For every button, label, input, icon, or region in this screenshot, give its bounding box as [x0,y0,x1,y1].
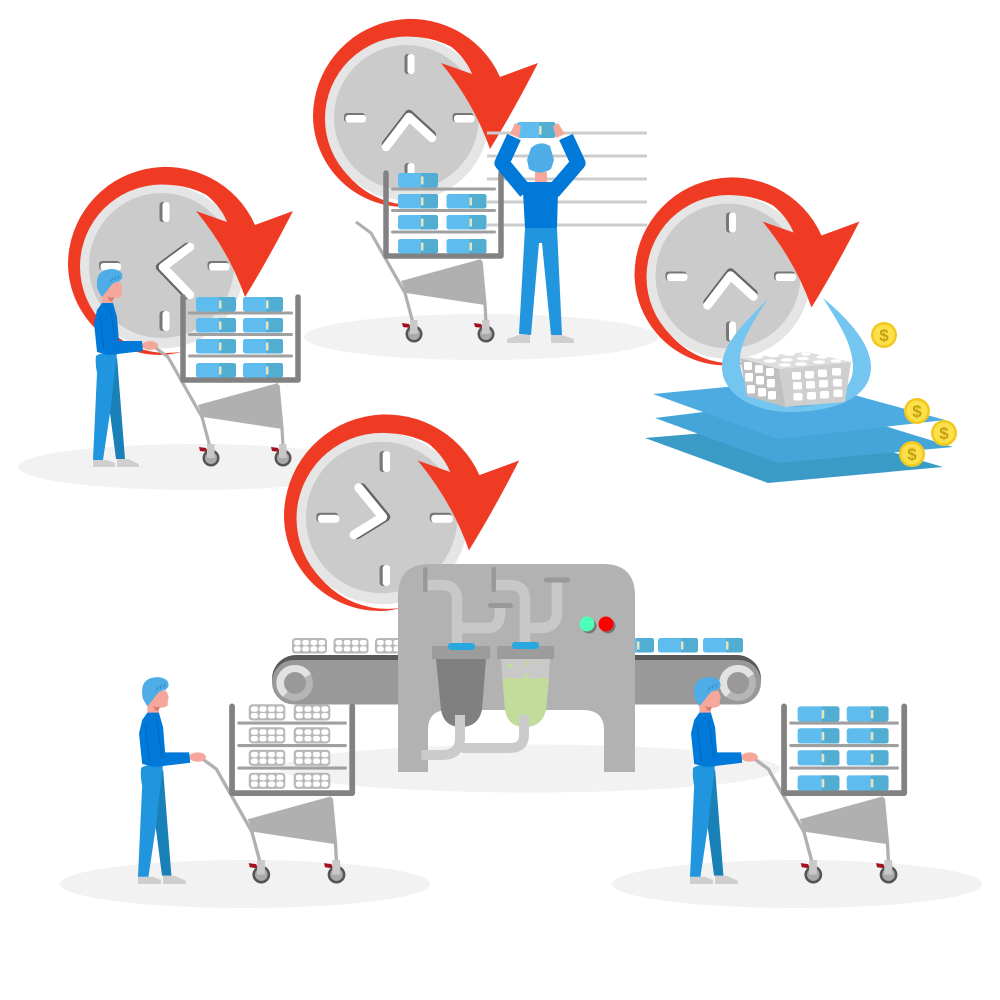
coin fourth [899,441,925,467]
ground shadows [18,314,982,908]
coated sheets and tray [645,298,953,483]
coin top: $ [879,326,889,345]
worker holding tray overhead [502,122,578,343]
coin second: $ [912,402,922,421]
clock: top scene [313,19,538,207]
liquid tank [501,659,550,727]
conveyor belt [272,655,761,704]
coated items on conveyor [614,638,743,652]
dark tank [436,659,486,727]
pipes upper [425,580,557,645]
pipe caps [423,567,570,608]
clock: left scene [68,167,293,355]
coin third [931,420,957,446]
coating machine [398,564,635,772]
trays on conveyor [292,638,410,654]
clock: machine scene [284,414,519,611]
cart: top scene [356,173,501,342]
worker pushing tray cart: bottom left [138,677,352,884]
worker pushing cart: left scene [93,269,298,467]
worker pushing blue cart: bottom right [690,677,904,884]
coin second [904,398,930,424]
pipes lower [422,715,524,755]
coin fourth: $ [907,445,917,464]
speed lines behind worker [487,132,647,226]
coin top [871,322,897,348]
status buttons [580,616,616,634]
coin third: $ [939,424,949,443]
clock: right scene [634,177,860,366]
lids [432,642,554,659]
